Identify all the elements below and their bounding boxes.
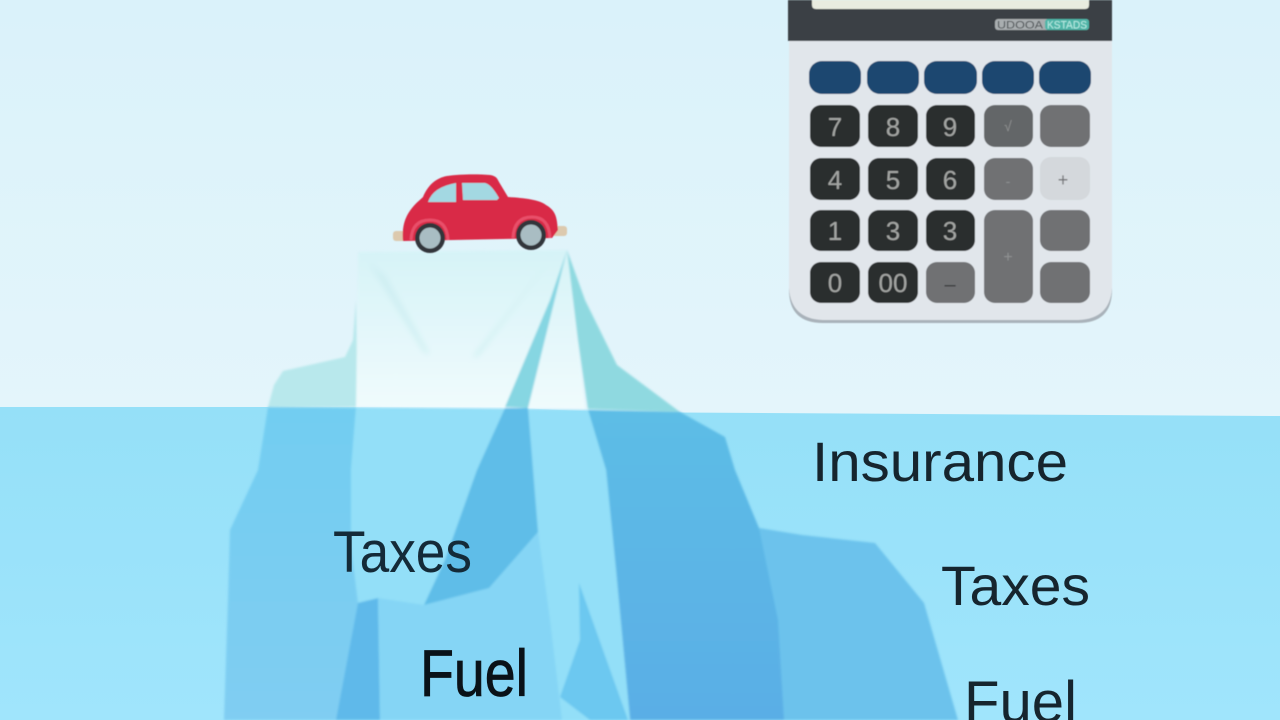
rear window	[428, 183, 456, 202]
iceberg left mass underwater	[224, 407, 370, 720]
iceberg	[224, 250, 958, 720]
dark number keys	[810, 105, 975, 303]
blue function keys	[809, 61, 1091, 94]
key labels: 3	[943, 216, 957, 246]
label: Fuel left: Fuel	[420, 636, 528, 710]
calculator brand label: UDOOA	[997, 20, 1044, 32]
front window	[462, 183, 499, 200]
label: Taxes left: Taxes	[333, 520, 472, 585]
label: Taxes right: Taxes	[941, 554, 1090, 617]
iceberg lower right wedge	[560, 583, 628, 720]
iceberg tip above water	[268, 250, 680, 412]
key labels: 7	[828, 112, 842, 142]
front wheel	[516, 220, 546, 250]
key labels: 9	[943, 112, 957, 142]
water	[0, 407, 1280, 720]
key labels: 0	[828, 268, 842, 298]
front bumper	[552, 226, 567, 236]
key labels: √	[1004, 118, 1012, 134]
key labels: 5	[886, 165, 900, 195]
label: Insurance: Insurance	[812, 430, 1068, 493]
calculator	[788, 0, 1112, 323]
calculator brand label: KSTADS	[1047, 20, 1087, 32]
key labels: -	[1006, 173, 1011, 189]
calculator body	[789, 0, 1112, 323]
key labels: 1	[828, 216, 842, 246]
rear bumper	[393, 231, 409, 241]
key labels: 3	[886, 216, 900, 246]
car	[393, 174, 567, 253]
calculator display	[812, 0, 1089, 9]
key labels: 00	[879, 268, 907, 298]
key labels: +	[1003, 249, 1013, 266]
rear wheel arch	[411, 220, 448, 240]
iceberg centre wedge	[424, 408, 538, 605]
iceberg lower left strip	[336, 598, 380, 720]
key labels: 8	[886, 112, 900, 142]
key labels: +	[1058, 170, 1068, 190]
iceberg light front facet	[351, 408, 630, 720]
iceberg deep facet right	[588, 410, 784, 720]
key labels: 4	[828, 165, 842, 195]
front wheel arch	[513, 217, 550, 238]
car body	[403, 174, 558, 241]
grey operator keys	[926, 105, 1090, 303]
sky background	[0, 0, 1280, 418]
key labels: 6	[943, 165, 957, 195]
key labels	[828, 112, 1068, 298]
iceberg right lobe underwater	[759, 528, 958, 720]
rear wheel	[415, 223, 445, 253]
light plus key	[1040, 157, 1090, 200]
iceberg lighter lower front facet	[378, 532, 562, 720]
key labels: –	[944, 274, 956, 296]
calculator header band	[788, 0, 1112, 41]
calculator brand label	[995, 19, 1089, 32]
